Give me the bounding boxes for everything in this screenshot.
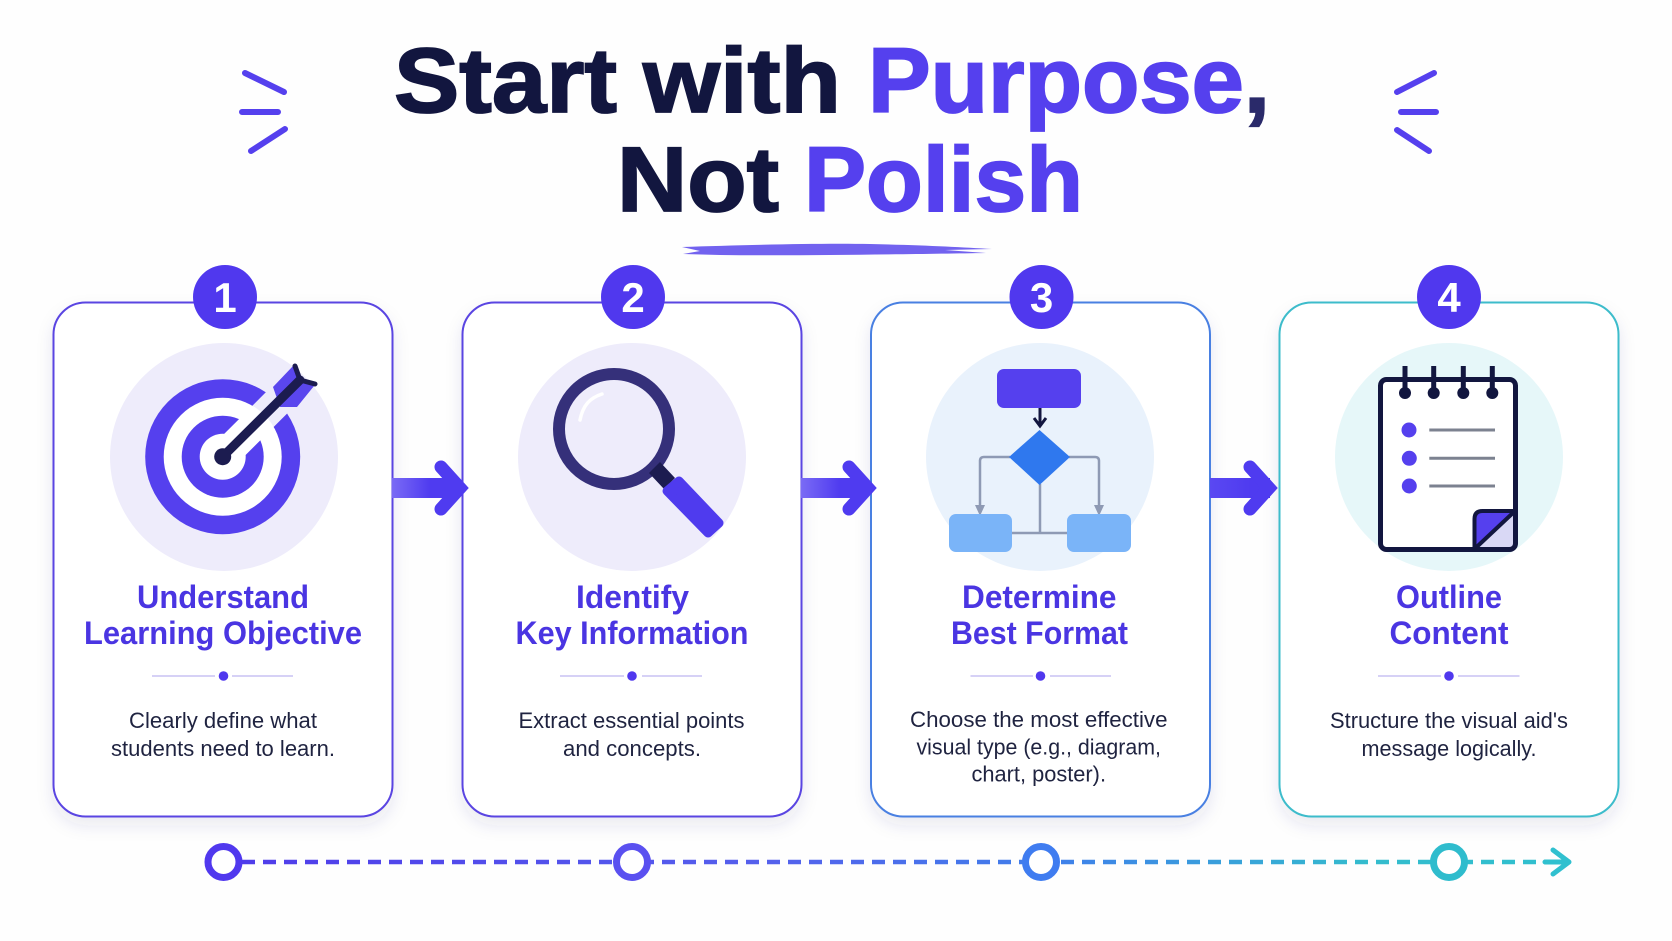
step 2 heading — [516, 579, 748, 651]
icon: target with arrow — [110, 343, 338, 571]
step 2 divider — [560, 671, 702, 681]
step number badge 3 — [1010, 265, 1074, 329]
step 1 description: students need to learn. — [111, 736, 335, 761]
step 3 description: Choose the most effective — [910, 707, 1168, 732]
step 2 description: Extract essential points — [518, 708, 744, 733]
icon: magnifying glass — [518, 343, 746, 571]
arrow: step 1 to step 2 — [392, 467, 460, 509]
step number badge 4: 4 — [1437, 274, 1461, 321]
step number badge 1: 1 — [213, 274, 237, 321]
timeline node 2 — [616, 846, 648, 878]
title: with — [642, 30, 841, 132]
step 2 heading: Identify — [576, 579, 689, 615]
step 2 heading: Key Information — [516, 615, 748, 651]
timeline node 3 — [1026, 846, 1056, 878]
step 2 description — [518, 708, 744, 761]
step 4 heading — [1390, 579, 1509, 651]
title: Polish — [804, 129, 1083, 231]
step number badge 1 — [193, 265, 257, 329]
title: Purpose, — [868, 30, 1270, 132]
icon: flowchart — [926, 343, 1154, 571]
timeline node 4 — [1434, 846, 1464, 878]
icon: notepad checklist — [1335, 343, 1563, 571]
step 1 heading: Understand — [137, 579, 309, 615]
title underline brush stroke — [682, 244, 992, 255]
title — [394, 30, 1270, 231]
step number badge 4 — [1417, 265, 1481, 329]
timeline node 1 — [208, 846, 239, 878]
step 1 description: Clearly define what — [129, 708, 317, 733]
step number badge 3: 3 — [1030, 274, 1053, 321]
arrow: step 3 to step 4 — [1210, 467, 1270, 509]
step 3 description: visual type (e.g., diagram, — [916, 734, 1161, 760]
panel: step 3 — [871, 265, 1210, 816]
step 4 heading: Outline — [1396, 579, 1502, 615]
panel: step 4 — [1280, 265, 1618, 816]
step 4 description: message logically. — [1362, 736, 1536, 761]
step 3 description: chart, poster). — [972, 762, 1106, 786]
arrow: step 2 to step 3 — [801, 467, 868, 509]
title: Start — [394, 30, 617, 132]
step 3 heading: Best Format — [951, 615, 1128, 651]
step 2 description: and concepts. — [563, 736, 701, 761]
progress timeline — [208, 846, 1569, 878]
icon: left sparks — [242, 73, 285, 151]
step 4 description: Structure the visual aid's — [1330, 708, 1568, 733]
step 3 heading: Determine — [962, 579, 1116, 615]
title: Not — [617, 129, 779, 231]
step number badge 2: 2 — [621, 274, 645, 321]
step 4 divider — [1378, 671, 1520, 681]
panel: step 1 — [54, 265, 392, 816]
icon: right sparks — [1397, 73, 1436, 151]
step 3 heading — [951, 579, 1128, 651]
step 1 description — [111, 708, 335, 761]
panel: step 2 — [462, 265, 802, 816]
step 4 heading: Content — [1390, 615, 1509, 651]
step 1 divider — [152, 671, 293, 681]
step 1 heading: Learning Objective — [84, 615, 362, 651]
step 4 description — [1330, 708, 1568, 761]
step number badge 2 — [601, 265, 665, 329]
step 3 description — [910, 707, 1168, 786]
step 1 heading — [84, 579, 362, 651]
step 3 divider — [970, 671, 1111, 681]
